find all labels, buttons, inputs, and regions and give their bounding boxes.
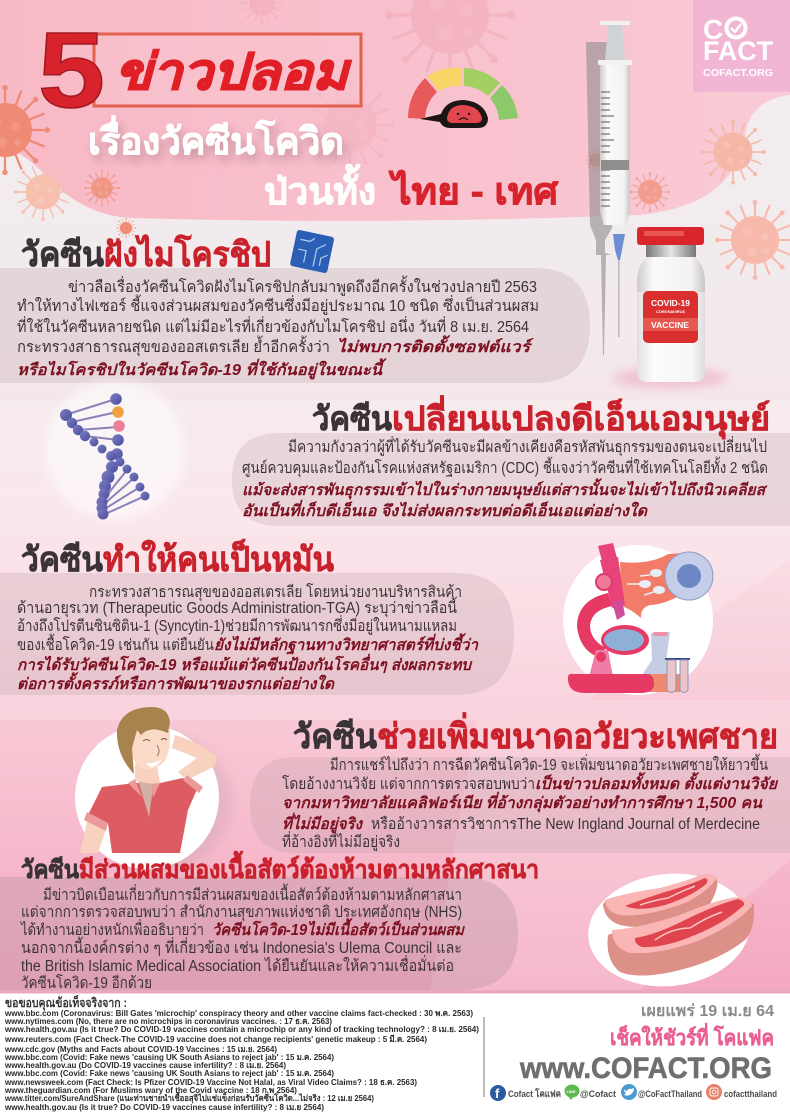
body text 5: วัคซีนโควิด-19ไม่มีเนื้อสัตว์เป็นส่วนผสม [212, 918, 466, 939]
big number 5: 5 [38, 9, 105, 130]
sources list: www.titter.com/SureAndShare (แนะท่านชายนำเชื้ออสุจิไปแช่แข็งก่อนรับวัคซีนโควิด...ไม่จริง : 12 เม.ย 2564) [4, 1091, 374, 1104]
panel: DNA [232, 395, 790, 526]
sources list [4, 1008, 479, 1112]
body text 3: ยังไม่มีหลักฐานทางวิทยาศาสตร์ที่บ่งชี้ว่า [214, 633, 479, 655]
sources list: www.nytimes.com (No, there are no microchips in coronavirus vaccines. : 17 ธ.ค. 2563) [4, 1016, 332, 1026]
body text 4: หรืออ้างวารสารวิชาการThe New Ingland Journal of Merdecine [371, 815, 760, 833]
heading 5 [21, 850, 539, 884]
icon: vaccine vial: VACCINE [651, 321, 690, 330]
logo: Cofact: COFACT.ORG [703, 68, 773, 79]
body text 4: ที่ไม่มีอยู่จริง [282, 812, 363, 834]
sources list: www.theguardian.com (For Muslims wary of the Covid vaccine : 18 ก.พ 2564) [4, 1085, 297, 1095]
sources list: www.health.gov.au (Do COVID-19 vaccines cause infertility? : 8 เม.ย. 2564) [4, 1060, 286, 1070]
body text 1 [17, 275, 539, 380]
sources list: www.newsweek.com (Fact Check: Is Pfizer COVID-19 Vaccine Not Halal, as Viral Video Claims? : 18 ธ.ค. 2563) [4, 1077, 417, 1087]
title line 3 red: ไทย - เทศ [388, 169, 559, 212]
body text 5: มีข่าวบิดเบือนเกี่ยวกับการมีส่วนผสมของเนื้อสัตว์ต้องห้ามตามหลักศาสนา [43, 883, 462, 904]
heading 5: วัคซีน [21, 856, 79, 884]
title box [94, 34, 361, 106]
text panel 3 [0, 573, 514, 695]
title line 1: ข่าวปลอม [115, 44, 352, 100]
body text 4 [282, 753, 779, 852]
sources list: www.reuters.com (Fact Check-The COVID-19 vaccine does not change recipients' genetic makeup : 5 มี.ค. 2564) [4, 1034, 427, 1044]
sources list: www.cdc.gov (Myths and Facts about COVID-19 Vaccines : 15 เม.ย. 2564) [4, 1044, 277, 1054]
top pink banner shape [0, 0, 790, 221]
logo: Cofact: C [703, 14, 723, 45]
heading 2: เปลี่ยนแปลงดีเอ็นเอมนุษย์ [392, 395, 770, 440]
text panel 5 [0, 877, 518, 990]
panel: forbidden ingredients [0, 850, 539, 992]
body text 3: ของเชื้อโควิด-19 เช่นกัน แต่ยืนยัน [17, 633, 214, 654]
sources list: www.health.gov.au (Is it true? Do COVID-19 vaccines contain a microchip or any kind of tracking technology? : 8 เม.ย. 2564) [4, 1024, 479, 1034]
body text 1: ไม่พบการติดตั้งซอฟต์แวร์ [337, 335, 535, 356]
panel: infertility [0, 538, 514, 695]
body text 4: เป็นข่าวปลอมทั้งหมด ตั้งแต่งานวิจัย [535, 772, 779, 793]
text panel 4 [250, 757, 790, 853]
text panel 1 [0, 268, 590, 383]
social: facebook: f [495, 1086, 500, 1101]
social: instagram [706, 1084, 777, 1100]
footer divider [484, 1017, 485, 1097]
sources list: www.bbc.com (Covid: Fake news 'causing UK South Asians to reject jab' : 15 ม.ค. 2564) [4, 1052, 334, 1062]
heading 1: ฝังไมโครชิป [104, 234, 271, 274]
heading 2 [312, 395, 770, 440]
title line 2: เรื่องวัคซีนโควิด [88, 115, 344, 162]
body text 5: นอกจากนี้องค์กรต่าง ๆ ที่เกี่ยวข้อง เช่น Indonesia's Ulema Council และ [21, 936, 462, 957]
body text 5: the British Islamic Medical Association ได้ยืนยันและให้ความเชื่อมั่นต่อ [21, 955, 454, 975]
footer [0, 990, 790, 1117]
body text 1: ทำให้ทางไฟเซอร์ ชี้แจงส่วนผสมของวัคซีนซึ่งมีอยู่ประมาณ 10 ชนิด ซึ่งเป็นส่วนผสม [17, 294, 539, 316]
body text 3 [17, 583, 479, 693]
social: facebook: Cofact โคแฟค [508, 1088, 561, 1100]
body text 4: ที่อ้างอิงที่ไม่มีอยู่จริง [282, 831, 400, 852]
body text 5: แต่จากการตรวจสอบพบว่า สำนักงานสุขภาพแห่งชาติ ประเทศอังกฤษ (NHS) [21, 904, 462, 922]
heading 3: ทำให้คนเป็นหมัน [103, 538, 334, 579]
logo: Cofact [693, 0, 790, 92]
icon: microscope [563, 543, 713, 695]
panel: microchip [0, 229, 590, 383]
social: twitter [621, 1084, 702, 1100]
sources list: www.bbc.com (Covid: Fake news 'causing UK South Asians to reject jab' : 15 ม.ค. 2564) [4, 1068, 334, 1078]
social: instagram: cofactthailand [724, 1089, 777, 1100]
title [38, 9, 559, 212]
body text 3: การได้รับวัคซีนโควิด-19 หรือแม้แต่วัคซีนป้องกันโรคอื่นๆ ส่งผลกระทบ [17, 653, 473, 674]
body text 5: วัคซีนโควิด-19 อีกด้วย [21, 974, 152, 992]
social: line: LINE [566, 1089, 576, 1094]
icon: microchip [290, 229, 335, 274]
panel: enlargement [250, 712, 790, 853]
text panel 2 [232, 433, 790, 526]
body text 1: ข่าวลือเรื่องวัคซีนโควิดฝังไมโครชิปกลับมาพูดถึงอีกครั้งในช่วงปลายปี 2563 [68, 275, 537, 297]
body text 3: อ้างถึงโปรตีนซินซิติน-1 (Syncytin-1)ช่วยมีการพัฒนารกซึ่งมีอยู่ในหนามแหลม [17, 615, 457, 636]
icon: fake news gauge [408, 68, 518, 128]
sources list: www.health.gov.au (Is it true? Do COVID-19 vaccines cause infertility? : 8 เม.ย 2564) [4, 1102, 324, 1112]
heading 3: วัคซีน [21, 541, 103, 579]
body text 3: ต่อการตั้งครรภ์หรือการพัฒนาของรกแต่อย่างใด [17, 672, 335, 693]
background viruses [0, 0, 790, 280]
publish date: เผยแพร่ 19 เม.ย 64 [641, 1003, 774, 1020]
body text 5: ได้ทำงานอย่างหนักเพื่ออธิบายว่า [19, 919, 204, 939]
sources heading: ขอขอบคุณข้อเท็จจริงจาก : [5, 995, 127, 1011]
social: facebook [490, 1085, 561, 1101]
title line 2 shadow: เรื่องวัคซีนโควิด [92, 121, 348, 168]
icon: DNA helix [45, 380, 185, 520]
heading 4: ช่วยเพิ่มขนาดอวัยวะเพศชาย [377, 712, 778, 756]
heading 1: วัคซีน [21, 236, 104, 274]
icon: vaccine vial: COVID-19 [651, 298, 690, 308]
icon: vaccine vial [612, 227, 728, 388]
body text 3: ด้านอายุรเวท (Therapeutic Goods Administration-TGA) ระบุว่าข่าวลือนี้ [17, 596, 457, 618]
body text 2: อันเป็นที่เก็บดีเอ็นเอ จึงไม่ส่งผลกระทบต่อดีเอ็นเอแต่อย่างใด [242, 499, 648, 520]
heading 4 [293, 712, 778, 756]
heading 4: วัคซีน [293, 718, 377, 756]
body text 3: กระทรวงสาธารณสุขของออสเตรเลีย โดยหน่วยงานบริหารสินค้า [89, 583, 462, 602]
body text 4: โดยอ้างงานวิจัย แต่จากการตรวจสอบพบว่า [282, 775, 535, 793]
body text 1: กระทรวงสาธารณสุขของออสเตรเลีย ย้ำอีกครั้งว่า [17, 335, 330, 357]
lower faceted background [0, 400, 790, 990]
heading 1 [21, 234, 271, 274]
body text 1: หรือไมโครชิปในวัคซีนโควิด-19 ที่ใช้กันอยู่ในขณะนี้ [17, 358, 388, 380]
icon: pork belly [583, 866, 755, 994]
tagline: เช็คให้ชัวร์ที่ โคแฟค [610, 1022, 774, 1050]
body text 4: จากมหาวิทยาลัยแคลิฟอร์เนีย ที่อ้างกลุ่มตัวอย่างทำการศึกษา 1,500 คน [282, 791, 763, 813]
body text 2: แม้จะส่งสารพันธุกรรมเข้าไปในร่างกายมนุษย์แต่สารนั้นจะไม่เข้าไปถึงนิวเคลียส [242, 478, 768, 500]
logo: Cofact: FACT [703, 36, 773, 66]
icon: vaccine vial: CORONAVIRUS [656, 310, 686, 314]
website: www.COFACT.ORG [519, 1052, 772, 1085]
body text 5 [19, 883, 466, 992]
body text 2 [242, 436, 768, 520]
icon: man [75, 707, 232, 872]
social: line [564, 1084, 617, 1100]
body text 1: ที่ใช้ในวัคซีนหลายชนิด แต่ไม่มีอะไรที่เกี่ยวข้องกับไมโครชิป อนึ่ง วันที่ 8 เม.ย. 2564 [17, 316, 529, 336]
social: twitter: @CoFactThailand [638, 1089, 702, 1100]
heading 3 [21, 538, 334, 579]
sources list: www.bbc.com (Coronavirus: Bill Gates 'microchip' conspiracy theory and other vaccine claims fact-checked : 30 พ.ค. 2563) [4, 1008, 473, 1018]
social: line: @Cofact [580, 1089, 617, 1100]
title line 3: ป่วนทั้ง [264, 164, 376, 212]
heading 2: วัคซีน [312, 400, 392, 437]
heading 5: มีส่วนผสมของเนื้อสัตว์ต้องห้ามตามหลักศาสนา [79, 850, 539, 884]
icon: syringe [586, 21, 632, 355]
